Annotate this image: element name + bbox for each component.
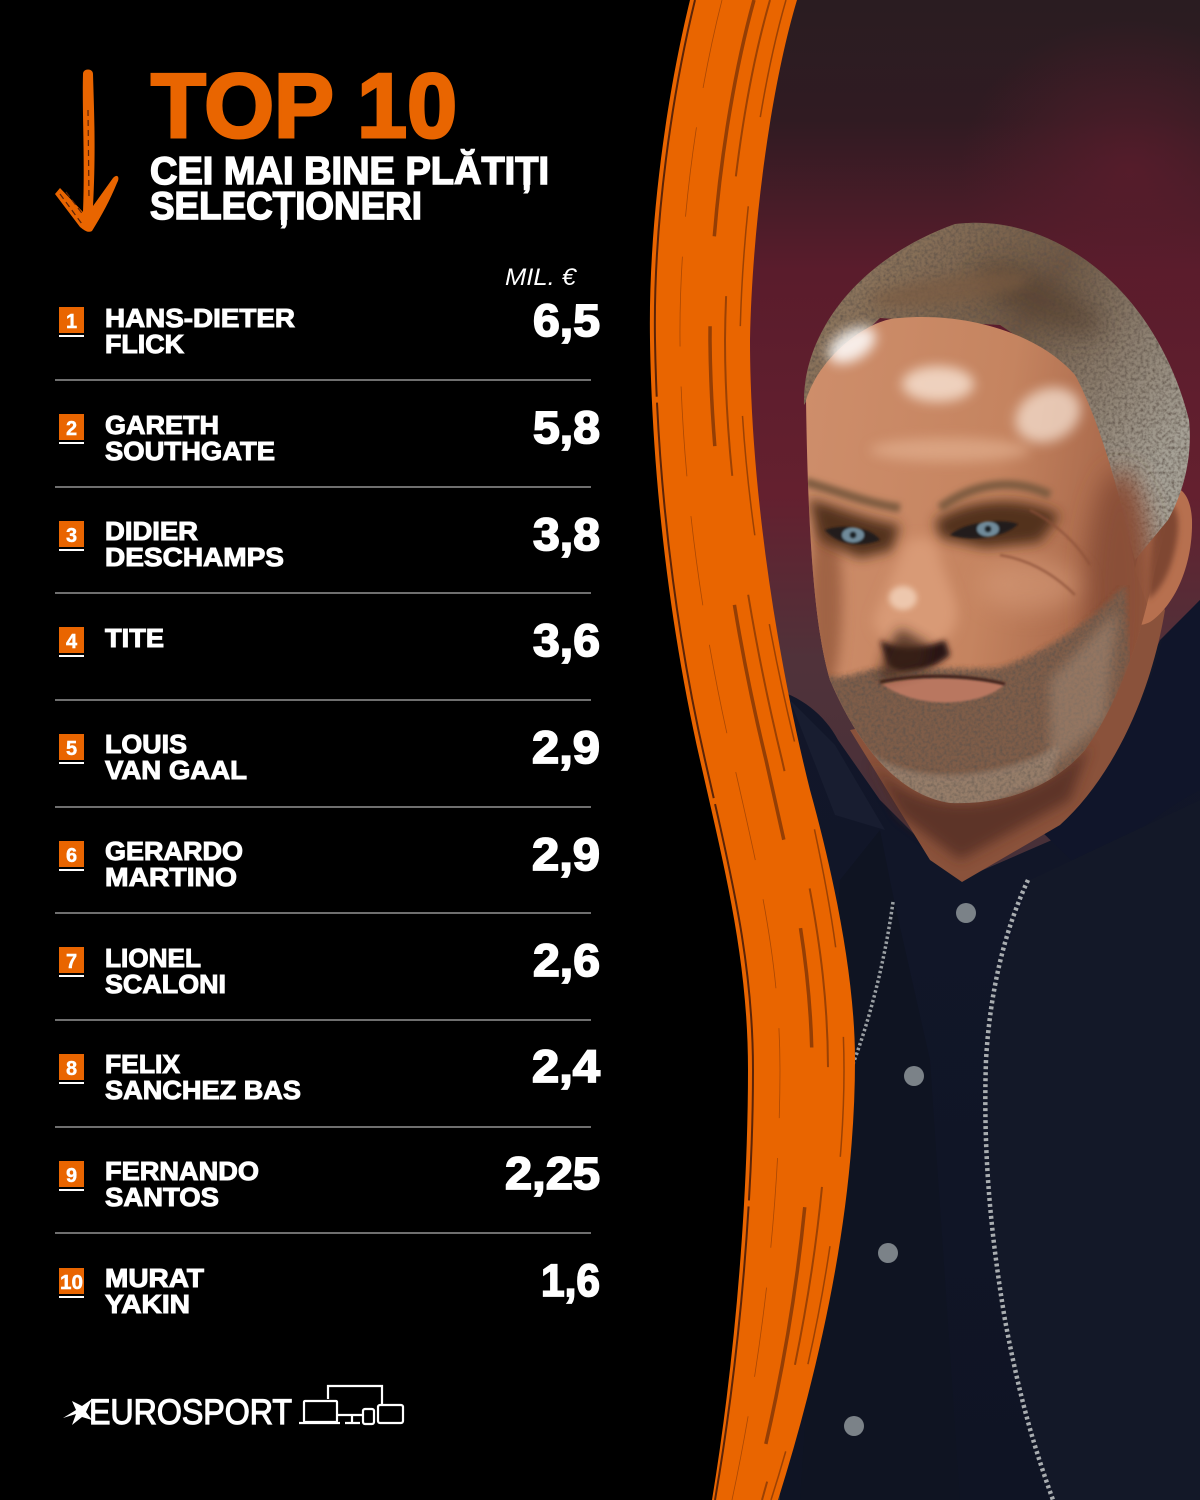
row 3 xyxy=(59,509,600,572)
jacket xyxy=(770,600,1200,1500)
row 5: VAN GAAL xyxy=(105,755,247,785)
icon: devices xyxy=(299,1386,403,1424)
row 10: YAKIN xyxy=(105,1289,190,1319)
subtitle: CEI MAI BINE PLĂTIȚI xyxy=(150,149,549,193)
beard xyxy=(825,585,1130,815)
eyebrows and eye sockets xyxy=(805,482,1060,558)
right zipper xyxy=(985,880,1053,1500)
subtitle xyxy=(150,149,549,228)
row 8: 8 xyxy=(66,1058,77,1080)
row 7: 2,6 xyxy=(533,935,600,986)
nose xyxy=(873,538,957,673)
neck xyxy=(850,609,1165,882)
row 2: 2 xyxy=(66,418,77,440)
row 2: 5,8 xyxy=(533,402,600,453)
row 4 xyxy=(59,615,600,666)
left eye xyxy=(825,527,880,544)
mouth xyxy=(882,678,1005,702)
row 9: 2,25 xyxy=(505,1148,600,1199)
row 7: LIONEL xyxy=(105,943,201,973)
skin xyxy=(806,317,1118,800)
row 1: HANS-DIETER xyxy=(105,303,295,333)
ear xyxy=(1137,490,1192,625)
row 3: DESCHAMPS xyxy=(105,542,284,572)
row 1 xyxy=(59,295,600,359)
row 9: FERNANDO xyxy=(105,1156,259,1186)
hair xyxy=(804,223,1190,560)
row 6 xyxy=(59,829,600,892)
row 6: GERARDO xyxy=(105,836,243,866)
row 5: 2,9 xyxy=(532,722,600,773)
row 10: 10 xyxy=(60,1272,83,1294)
left zipper xyxy=(854,902,895,1064)
row 2 xyxy=(59,402,600,466)
row 6: MARTINO xyxy=(105,862,237,892)
hair shading xyxy=(878,259,1106,342)
row 1: 1 xyxy=(66,311,77,333)
Eurosport logo xyxy=(63,1393,292,1432)
row 8 xyxy=(59,1041,600,1105)
forehead highlights xyxy=(822,319,1090,462)
arrow icon xyxy=(55,70,118,232)
row 10: MURAT xyxy=(105,1263,204,1293)
row 1: FLICK xyxy=(105,329,184,359)
row 4: TITE xyxy=(105,623,164,653)
row 10 xyxy=(59,1255,600,1319)
photo: coach portrait xyxy=(750,0,1200,1500)
row 6: 2,9 xyxy=(532,829,600,880)
row 9: 9 xyxy=(66,1165,77,1187)
row 7 xyxy=(59,935,600,999)
right eye xyxy=(950,521,1018,538)
row 5: LOUIS xyxy=(105,729,187,759)
row 5: 5 xyxy=(66,738,77,760)
row 5 xyxy=(59,722,600,785)
row 3: 3 xyxy=(66,525,77,547)
row 2: SOUTHGATE xyxy=(105,436,275,466)
wordmark: EUROSPORT xyxy=(89,1393,292,1432)
jacket buttons xyxy=(844,903,976,1436)
row 8: 2,4 xyxy=(532,1041,600,1092)
row 4: 4 xyxy=(66,631,78,653)
row 7: SCALONI xyxy=(105,969,226,999)
row 4: 3,6 xyxy=(533,615,600,666)
row 10: 1,6 xyxy=(541,1255,600,1306)
row 8: FELIX xyxy=(105,1049,181,1079)
title: TOP 10 xyxy=(151,56,457,157)
icon: star xyxy=(63,1399,92,1425)
row 9 xyxy=(59,1148,600,1212)
column heading: MIL. € xyxy=(505,264,578,291)
row 2: GARETH xyxy=(105,410,219,440)
row 3: 3,8 xyxy=(533,509,600,560)
orange brush stroke divider xyxy=(650,0,855,1500)
face xyxy=(790,250,1160,815)
skin shading xyxy=(1086,470,1154,730)
row 9: SANTOS xyxy=(105,1182,219,1212)
subtitle: SELECȚIONERI xyxy=(150,185,422,228)
row 8: SANCHEZ BAS xyxy=(105,1075,301,1105)
row 1: 6,5 xyxy=(533,295,600,346)
photo background xyxy=(750,0,1200,1500)
row 6: 6 xyxy=(66,845,77,867)
row 3: DIDIER xyxy=(105,516,198,546)
row 7: 7 xyxy=(66,951,77,973)
cheek wrinkles xyxy=(1000,510,1090,595)
